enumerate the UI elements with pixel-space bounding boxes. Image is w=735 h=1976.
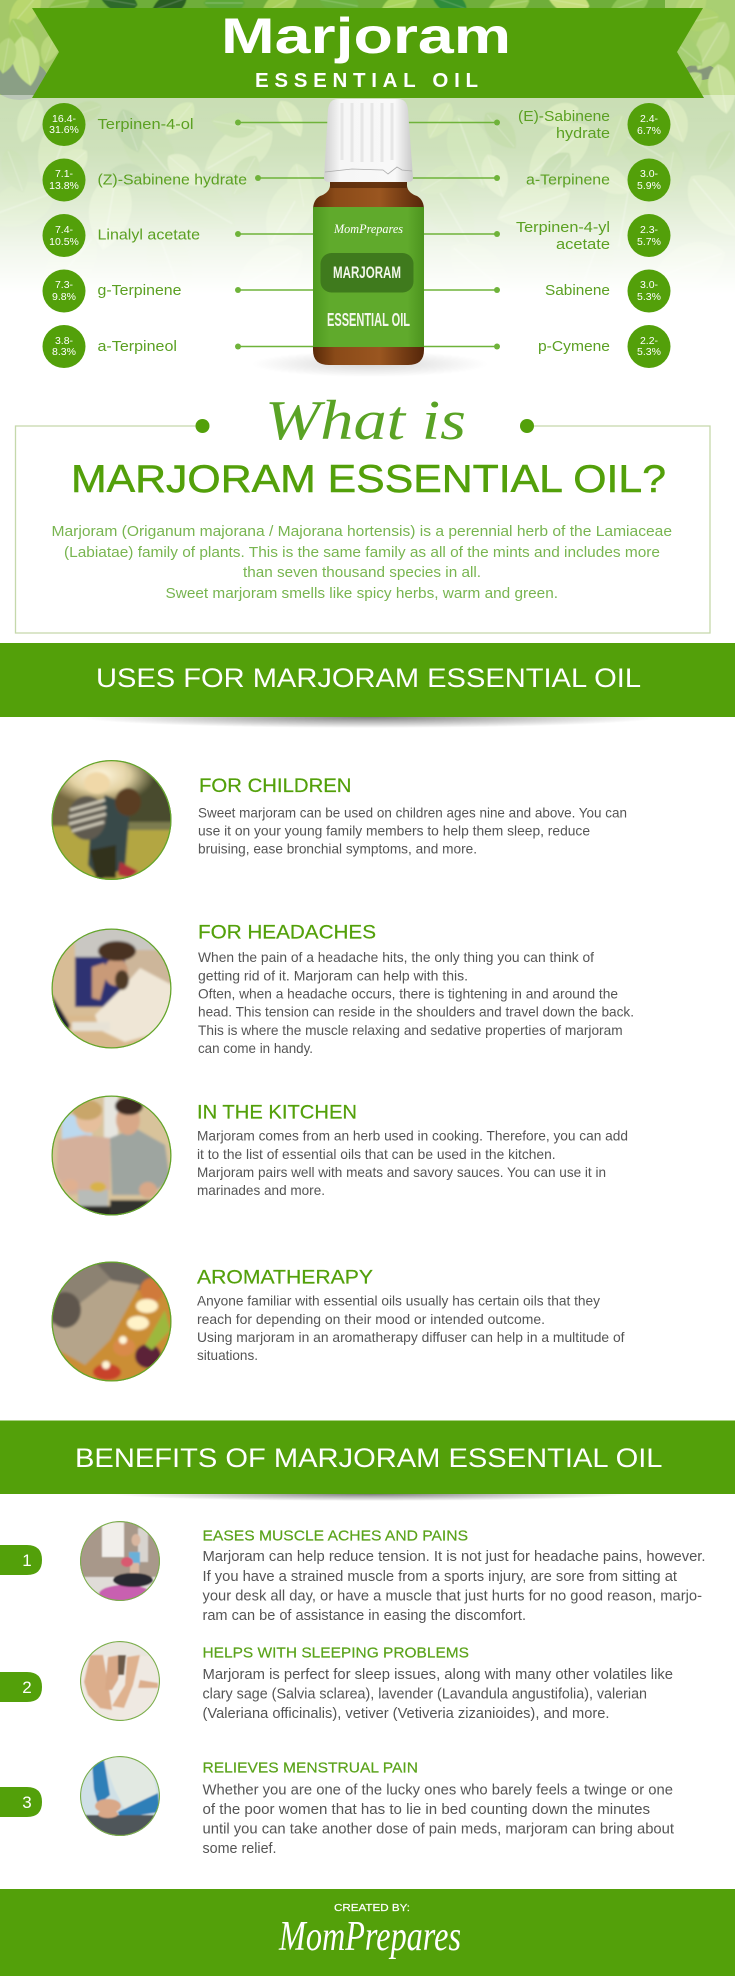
heading: AROMATHERAPY [197,1268,373,1289]
bottle: marjoram essential oil: ESSENTIAL OIL [327,310,410,330]
compound: a-Terpinene: a-Terpinene [526,172,610,188]
body text: until you can take another dose of pain meds, marjoram can bring about [202,1820,675,1837]
body text [197,1128,628,1198]
compound: Terpinen-4-yl acetate: 2.3- [640,224,659,236]
body text: (Valeriana officinalis), vetiver (Vetiveria zizanioides), and more. [202,1705,610,1722]
compound: Terpinen-4-ol: 16.4- [52,113,76,125]
compound: Sabinene: 5.3% [637,291,661,303]
heading: HELPS WITH SLEEPING PROBLEMS [202,1644,469,1661]
use: aromatherapy [49,1260,625,1384]
band: benefits heading [0,1420,735,1501]
compound: Terpinen-4-yl acetate: Terpinen-4-yl [516,219,610,236]
title ribbon [32,8,704,98]
body text: clary sage (Salvia sclarea), lavender (Lavandula angustifolia), valerian [202,1686,647,1703]
body text: Marjoram pairs well with meats and savory sauces. You can use it in [197,1164,606,1180]
benefit 3: relieves menstrual pain [0,1755,675,1857]
footer [0,1889,735,1976]
body text [202,1781,675,1857]
heading: IN THE KITCHEN [197,1103,357,1124]
compound: Sabinene: Sabinene [545,282,610,299]
compound: p-Cymene: 5.3% [637,346,661,358]
compound: g-Terpinene: 9.8% [52,291,76,303]
number tab 2 [0,1672,42,1702]
photo: mother carrying child [52,760,172,880]
body text: Often, when a headache occurs, there is tightening in and around the [198,986,618,1002]
band: benefits heading: BENEFITS OF MARJORAM ESSENTIAL OIL [75,1443,662,1473]
use: for children [52,760,626,880]
compound: Linalyl acetate: 10.5% [49,236,79,248]
compound: (E)-Sabinene hydrate: hydrate [556,125,610,142]
compound: g-Terpinene: 7.3- [55,279,74,291]
compound: a-Terpineol: a-Terpineol [98,338,177,355]
compound: (E)-Sabinene hydrate: 6.7% [637,125,661,137]
band: uses heading [0,643,735,728]
compound: (E)-Sabinene hydrate [405,103,670,146]
heading: FOR CHILDREN [199,776,352,797]
description: Sweet marjoram smells like spicy herbs, warm and green. [166,585,558,602]
body text: Whether you are one of the lucky ones who barely feels a twinge or one [202,1781,673,1798]
band: uses heading: USES FOR MARJORAM ESSENTIAL OIL [96,663,641,693]
benefit 1: eases muscle aches [0,1520,706,1624]
body text: When the pain of a headache hits, the only thing you can think of [198,949,594,965]
photo: man with headache [50,927,175,1051]
description: (Labiatae) family of plants. This is the same family as all of the mints and includes more [64,544,660,561]
compound: a-Terpineol [42,325,335,368]
compound: (E)-Sabinene hydrate: 2.4- [640,113,659,125]
heading: FOR HEADACHES [198,923,376,944]
heading: What is: What is [265,390,466,452]
body text [198,804,627,857]
photo: seated woman [79,1755,161,1839]
bottle: marjoram essential oil: MomPrepares [333,221,403,236]
photo: yoga [79,1520,161,1603]
description [52,523,672,602]
body text: your desk all day, or have a muscle that just hurts for no good reason, marjo- [202,1587,702,1604]
photo: towels and candles [49,1260,174,1384]
body text: Sweet marjoram can be used on children ages nine and above. You can [198,804,627,820]
body text: marinades and more. [197,1182,325,1198]
compound: Terpinen-4-ol [42,103,335,146]
compound: p-Cymene: p-Cymene [538,338,610,355]
body text: Marjoram is perfect for sleep issues, along with many other volatiles like [202,1666,673,1683]
body text: ram can be of assistance in easing the discomfort. [202,1607,526,1624]
compound: g-Terpinene: g-Terpinene [98,282,182,299]
body text: of the poor women that has to lie in bed counting down the minutes [202,1801,650,1818]
compound: (Z)-Sabinene hydrate: 13.8% [49,180,79,192]
photo: couple cooking [50,1094,174,1220]
body text [198,949,634,1056]
body text: bruising, ease bronchial symptoms, and more. [198,841,477,857]
compound: g-Terpinene [42,270,335,312]
heading: Marjoram essential oil?: MARJORAM ESSENTIAL OIL? [71,458,666,501]
compound: Sabinene: 3.0- [640,279,659,291]
logo: MomPrepares: MomPrepares [278,1914,461,1960]
body text [202,1548,706,1624]
use: for headaches [50,923,634,1056]
description: Marjoram (Origanum majorana / Majorana hortensis) is a perennial herb of the Lamiaceae [52,523,672,540]
compound: p-Cymene [415,325,670,368]
compound: Terpinen-4-ol: 31.6% [49,124,79,136]
use: in the kitchen [50,1094,628,1220]
description: than seven thousand species in all. [243,564,481,581]
compound: Linalyl acetate: Linalyl acetate [98,226,200,244]
body text: Using marjoram in an aromatherapy diffuser can help in a multitude of [197,1329,625,1345]
compound: Terpinen-4-yl acetate: 5.7% [637,236,661,248]
compound: a-Terpineol: 3.8- [55,335,74,347]
compound: a-Terpineol: 8.3% [52,346,76,358]
compound: (Z)-Sabinene hydrate: 7.1- [55,168,74,180]
compound: a-Terpinene: 5.9% [637,180,661,192]
compound: Terpinen-4-ol: Terpinen-4-ol [98,116,194,133]
body text: This is where the muscle relaxing and sedative properties of marjoram [198,1022,623,1038]
body text: Anyone familiar with essential oils usually has certain oils that they [197,1293,600,1309]
benefit 2: helps with sleeping [0,1640,673,1722]
body text: some relief. [202,1840,276,1857]
compound: a-Terpinene [405,158,670,202]
body text: Marjoram comes from an herb used in cooking. Therefore, you can add [197,1128,628,1144]
background: marjoram leaves [0,0,735,312]
body text: it to the list of essential oils that can be used in the kitchen. [197,1146,556,1162]
body text: situations. [197,1347,258,1363]
body text [202,1666,673,1722]
panel: what is marjoram essential oil [16,390,710,633]
number tab 3 [0,1787,42,1817]
body text: getting rid of it. Marjoram can help with this. [198,967,468,983]
compound: Terpinen-4-yl acetate [415,214,670,257]
compound: a-Terpinene: 3.0- [640,168,659,180]
title: Marjoram: Marjoram [221,8,511,64]
number tab 1 [0,1545,42,1575]
body text: Marjoram can help reduce tension. It is not just for headache pains, however. [202,1548,706,1565]
body text: can come in handy. [198,1040,313,1056]
compound: Terpinen-4-yl acetate: acetate [556,236,610,253]
body text [197,1293,625,1363]
number tab 3: 3 [22,1793,32,1812]
number tab 2: 2 [22,1678,32,1697]
compound: Linalyl acetate [42,214,335,257]
compound: p-Cymene: 2.2- [640,335,659,347]
compound: Linalyl acetate: 7.4- [55,224,74,236]
heading: EASES MUSCLE ACHES AND PAINS [202,1528,468,1545]
compound: (E)-Sabinene hydrate: (E)-Sabinene [518,108,610,125]
compound: Sabinene [415,270,670,312]
credit label: CREATED BY: [334,1902,410,1914]
photo: feet on bed [79,1640,161,1722]
subtitle: Essential Oil: ESSENTIAL OIL [255,69,478,92]
bottle: marjoram essential oil: MARJORAM [333,264,401,282]
body text: use it on your young family members to help them sleep, reduce [198,823,590,839]
body text: If you have a strained muscle from a sports injury, are sore from sitting at [202,1568,678,1585]
bottle: marjoram essential oil [252,99,488,377]
body text: reach for depending on their mood or intended outcome. [197,1311,545,1327]
heading: RELIEVES MENSTRUAL PAIN [202,1760,418,1777]
body text: head. This tension can reside in the shoulders and travel down the back. [198,1004,634,1020]
compound: (Z)-Sabinene hydrate: (Z)-Sabinene hydrate [98,172,247,188]
compound: (Z)-Sabinene hydrate [42,158,335,202]
number tab 1: 1 [22,1551,32,1570]
